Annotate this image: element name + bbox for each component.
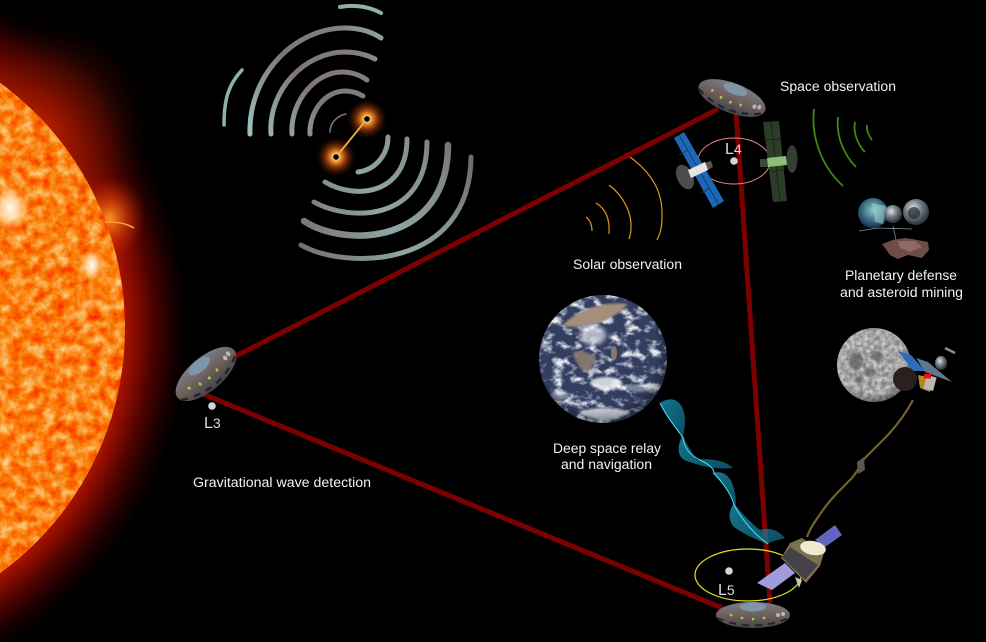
dark lander <box>893 367 917 391</box>
L5 marker <box>718 567 735 599</box>
solar observation signal arcs <box>586 157 662 240</box>
cyan communication ribbon <box>660 399 785 544</box>
L4 marker: L4 <box>725 141 742 158</box>
L3 marker: L3 <box>204 415 221 432</box>
upper corona glow <box>0 20 150 240</box>
label: deep space relay: and navigation <box>561 457 652 472</box>
gold body <box>918 375 933 392</box>
label: planetary defense <box>840 268 963 300</box>
label: gravitational wave detection: Gravitational wave detection <box>193 475 371 490</box>
ribbon strand <box>807 400 913 537</box>
saucer at L4 <box>693 71 771 125</box>
saucer at L3 <box>167 337 245 411</box>
right solar panel <box>916 358 952 382</box>
solar panels <box>763 121 787 202</box>
gold trim <box>781 538 824 583</box>
space observation signal arcs <box>813 109 872 186</box>
earth base ocean <box>539 295 667 423</box>
lower solar panel <box>757 563 795 590</box>
earth <box>539 295 667 423</box>
red module <box>924 374 931 378</box>
horn of africa clouds <box>580 325 606 345</box>
green satellite near L4 <box>760 121 798 202</box>
saucer at L5 <box>716 602 790 628</box>
solar disc <box>0 25 125 631</box>
moon limb shading <box>837 328 911 402</box>
body <box>767 156 787 167</box>
label: deep space relay: Deep space relay <box>553 441 661 456</box>
solar corona <box>0 0 240 642</box>
asteroid highlight <box>898 241 922 252</box>
ribbon knot <box>857 457 865 474</box>
blue satellite near L4 <box>672 132 724 208</box>
upper solar panel <box>815 525 842 547</box>
label: planetary defense: and asteroid mining <box>840 285 963 300</box>
gravitational waves from binary black hole <box>224 6 471 258</box>
earth clouds <box>539 295 667 423</box>
cloud swirls <box>551 377 652 400</box>
solar prominence <box>105 222 134 228</box>
label: planetary defense: Planetary defense <box>845 268 957 283</box>
L5 marker: L5 <box>718 582 735 599</box>
L4 halo orbit <box>698 138 770 184</box>
active region bright lower <box>80 248 104 282</box>
lunar maria <box>849 351 883 384</box>
middle sphere <box>884 205 902 223</box>
right sphere port <box>908 207 920 219</box>
moon <box>837 328 911 402</box>
asteroid mining probe <box>858 198 929 259</box>
active region bright <box>0 184 30 232</box>
lunar spacecraft <box>893 348 955 392</box>
gold communication ribbon <box>807 400 913 537</box>
ribbon bright crest <box>660 403 768 544</box>
dish <box>672 162 698 192</box>
triangle constellation links <box>203 109 770 608</box>
solar flare glow <box>74 176 146 260</box>
body silver <box>923 375 937 391</box>
madagascar <box>611 346 617 360</box>
foil strut <box>795 577 802 588</box>
label: space observation: Space observation <box>780 79 896 94</box>
right sphere <box>903 199 929 225</box>
dish <box>935 356 947 370</box>
antenna <box>945 348 955 353</box>
left solar panel <box>898 351 925 371</box>
left glass detail <box>872 203 886 224</box>
thruster <box>704 161 713 171</box>
moon surface <box>837 328 911 402</box>
north africa and arabia <box>562 303 628 327</box>
probe booms <box>859 226 912 240</box>
ribbon lobes <box>660 399 785 544</box>
L5 halo orbit <box>695 549 801 601</box>
solar panels <box>674 132 724 208</box>
dish <box>799 539 827 557</box>
wave arcs lower right <box>301 137 471 258</box>
relay satellite at L5 <box>757 525 842 590</box>
wave arcs upper left <box>224 6 381 134</box>
dish <box>786 145 798 173</box>
label: solar observation: Solar observation <box>573 257 682 272</box>
body <box>688 162 708 178</box>
asteroid <box>882 238 929 259</box>
label: deep space relay <box>553 441 661 472</box>
sun <box>0 0 240 642</box>
L3 marker <box>204 402 221 432</box>
dark bus <box>782 547 818 580</box>
southern africa <box>573 351 596 372</box>
south polar clouds <box>578 408 630 420</box>
earth limb shading <box>539 295 667 423</box>
left glass sphere <box>858 198 888 228</box>
black hole pair <box>316 99 387 177</box>
thruster <box>760 159 768 167</box>
